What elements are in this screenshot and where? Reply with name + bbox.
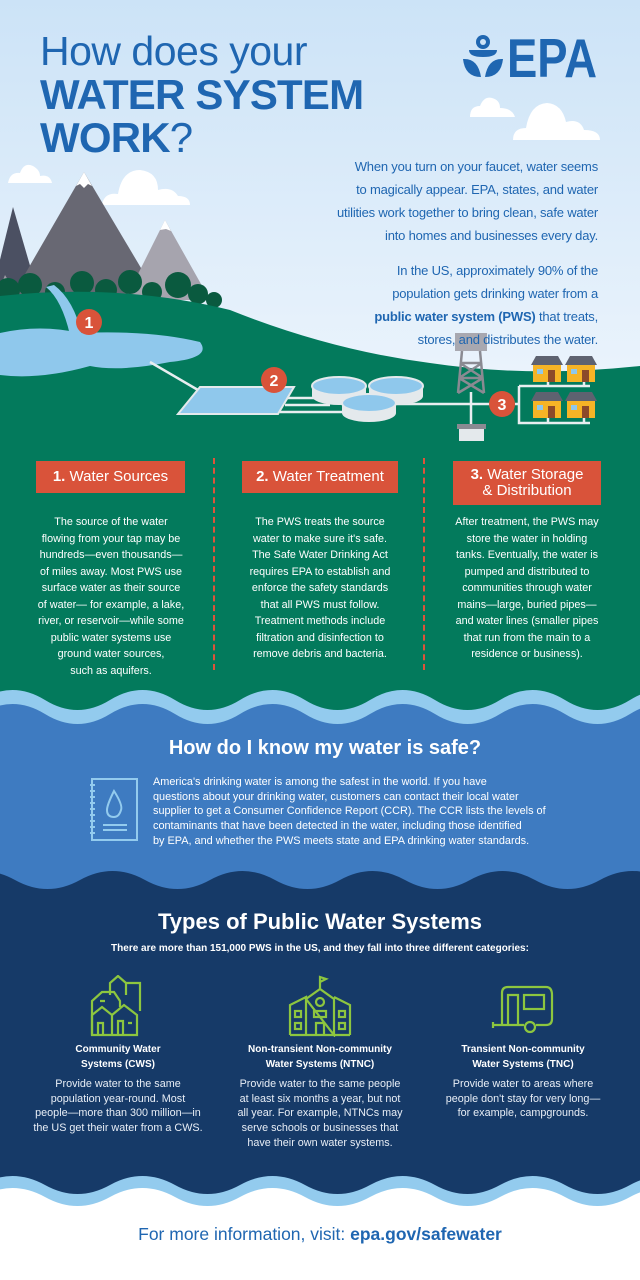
text 2: requires EPA to establish and xyxy=(250,566,390,578)
intro text: In the US, approximately 90% of the xyxy=(397,263,598,278)
panel: TNC: Water Systems (TNC) xyxy=(472,1058,574,1070)
text 1: public water systems use xyxy=(51,632,171,644)
text 1: hundreds—even thousands— xyxy=(40,549,182,561)
intro text: public water system (PWS) that treats, xyxy=(374,309,598,324)
footer: For more information, visit: epa.gov/safewater xyxy=(138,1224,502,1244)
panel: NTNC: at least six months a year, but not xyxy=(240,1093,400,1105)
marker 3 xyxy=(489,391,515,417)
houses xyxy=(531,356,597,418)
title: WATER SYSTEM xyxy=(40,71,363,118)
panel: NTNC: serve schools or businesses that xyxy=(242,1122,398,1134)
intro text: to magically appear. EPA, states, and water xyxy=(356,182,598,197)
heading: types: Types of Public Water Systems xyxy=(158,909,482,934)
illustration: pools, tanks, tower, houses, markers xyxy=(76,309,597,441)
heading 2: 2. Water Treatment xyxy=(256,468,384,485)
panel: CWS: Community Water xyxy=(75,1044,161,1055)
text 1: such as aquifers. xyxy=(70,664,152,676)
panel: CWS: Provide water to the same xyxy=(55,1078,181,1090)
heading: safe water: How do I know my water is safe? xyxy=(169,737,481,759)
intro text: When you turn on your faucet, water seems xyxy=(355,159,598,174)
text 2: Treatment methods include xyxy=(255,615,385,627)
text 3: pumped and distributed to xyxy=(465,566,589,578)
panel: steps xyxy=(36,461,601,676)
sedimentation pool xyxy=(178,387,294,414)
text 2: filtration and disinfection to xyxy=(256,632,384,644)
panel: TNC xyxy=(446,1044,600,1119)
panel: TNC: for example, campgrounds. xyxy=(458,1107,588,1119)
marker 1 xyxy=(76,309,102,335)
panel: NTNC: all year. For example, NTNCs may xyxy=(238,1107,402,1119)
intro text: stores, and distributes the water. xyxy=(418,332,598,347)
panel: TNC: Provide water to areas where xyxy=(453,1078,593,1090)
intro text: population gets drinking water from a xyxy=(392,286,598,301)
text: safe water: supplier to get a Consumer Confidence Report (CCR). The CCR lists the levels of xyxy=(153,805,546,817)
text: safe water: America's drinking water is among the safest in the world. If you have xyxy=(153,776,487,788)
pipes xyxy=(150,362,590,425)
heading 2 xyxy=(242,461,398,493)
text 1: of miles away. Most PWS use xyxy=(40,566,182,578)
dividers xyxy=(213,458,215,670)
marker 2: 2 xyxy=(270,373,279,390)
panel: NTNC: Provide water to the same people xyxy=(240,1078,400,1090)
text: safe water: questions about your drinking water, customers can contact their local water xyxy=(153,791,519,803)
logo: EPA xyxy=(463,32,597,82)
panel: NTNC xyxy=(238,1044,402,1149)
tanks xyxy=(312,377,423,422)
text 1: of water— for example, a lake, xyxy=(38,598,184,610)
panel: TNC: people don't stay for very long— xyxy=(446,1093,600,1105)
text 2 xyxy=(250,516,390,660)
heading 3 xyxy=(453,461,601,505)
background scene xyxy=(0,0,640,710)
text 2: water to make sure it's safe. xyxy=(253,532,387,544)
text 2: remove debris and bacteria. xyxy=(253,648,387,660)
text 3: residence or business). xyxy=(471,648,583,660)
text 3: After treatment, the PWS may xyxy=(455,516,599,528)
title xyxy=(40,28,363,161)
title: WORK? xyxy=(40,114,192,161)
panel: NTNC: Non-transient Non-community xyxy=(248,1044,392,1055)
panel: CWS: population year-round. Most xyxy=(51,1093,185,1105)
text 1: flowing from your tap may be xyxy=(42,532,180,544)
clouds xyxy=(8,98,600,205)
text 2: The Safe Water Drinking Act xyxy=(252,549,388,561)
panel: CWS: the US get their water from a CWS. xyxy=(33,1122,203,1134)
text 1: ground water sources, xyxy=(58,648,164,660)
waves and lower bands xyxy=(0,690,640,1206)
text: safe water xyxy=(153,776,546,847)
marker 2 xyxy=(261,367,287,393)
heading 3: & Distribution xyxy=(482,482,572,499)
panel: TNC: Transient Non-community xyxy=(461,1044,585,1055)
title: How does your xyxy=(40,28,307,74)
text 3: that run from the main to a xyxy=(464,632,590,644)
heading 1: 1. Water Sources xyxy=(53,468,168,485)
text 2: enforce the safety standards xyxy=(252,582,388,594)
intro text: utilities work together to bring clean, safe water xyxy=(337,205,598,220)
icon: school xyxy=(288,976,352,1037)
intro text: into homes and businesses every day. xyxy=(385,228,598,243)
text 1 xyxy=(38,516,184,676)
text 1: surface water as their source xyxy=(42,582,180,594)
text: safe water: by EPA, and whether the PWS meets state and EPA drinking water standards. xyxy=(153,835,529,847)
text 3: mains—large, buried pipes— xyxy=(457,598,597,610)
text 3 xyxy=(455,516,599,660)
heading 3: 3. Water Storage xyxy=(471,466,583,483)
text 3: tanks. Eventually, the water is xyxy=(456,549,598,561)
text 3: and water lines (smaller pipes xyxy=(456,615,598,627)
panel: NTNC: Water Systems (NTNC) xyxy=(266,1058,374,1070)
subtitle: There are more than 151,000 PWS in the US, and they fall into three different categories: xyxy=(111,943,529,954)
marker 3: 3 xyxy=(498,397,507,414)
icon: notebook with water drop xyxy=(90,778,138,841)
panel: NTNC: have their own water systems. xyxy=(247,1137,393,1149)
panel: CWS xyxy=(33,1044,203,1134)
trees xyxy=(0,270,222,308)
intro text xyxy=(337,159,598,347)
text 1: river, or reservoir—while some xyxy=(38,615,184,627)
text 3: store the water in holding xyxy=(467,532,587,544)
text: safe water: contaminants that have been detected in the water, including those identified xyxy=(153,820,522,832)
mountains xyxy=(0,207,40,300)
panel: CWS: Systems (CWS) xyxy=(81,1058,155,1070)
icon: camper trailer xyxy=(492,986,554,1034)
icon: community houses xyxy=(90,975,142,1036)
text 3: communities through water xyxy=(462,582,592,594)
panel: CWS: people—more than 300 million—in xyxy=(35,1107,201,1119)
water tower xyxy=(455,333,487,393)
text 2: that all PWS must follow. xyxy=(261,598,379,610)
lake and stream xyxy=(46,285,82,335)
text 1: The source of the water xyxy=(54,516,168,528)
heading 1 xyxy=(36,461,185,493)
green hills xyxy=(0,292,640,720)
marker 1: 1 xyxy=(85,315,94,332)
text 2: The PWS treats the source xyxy=(255,516,385,528)
